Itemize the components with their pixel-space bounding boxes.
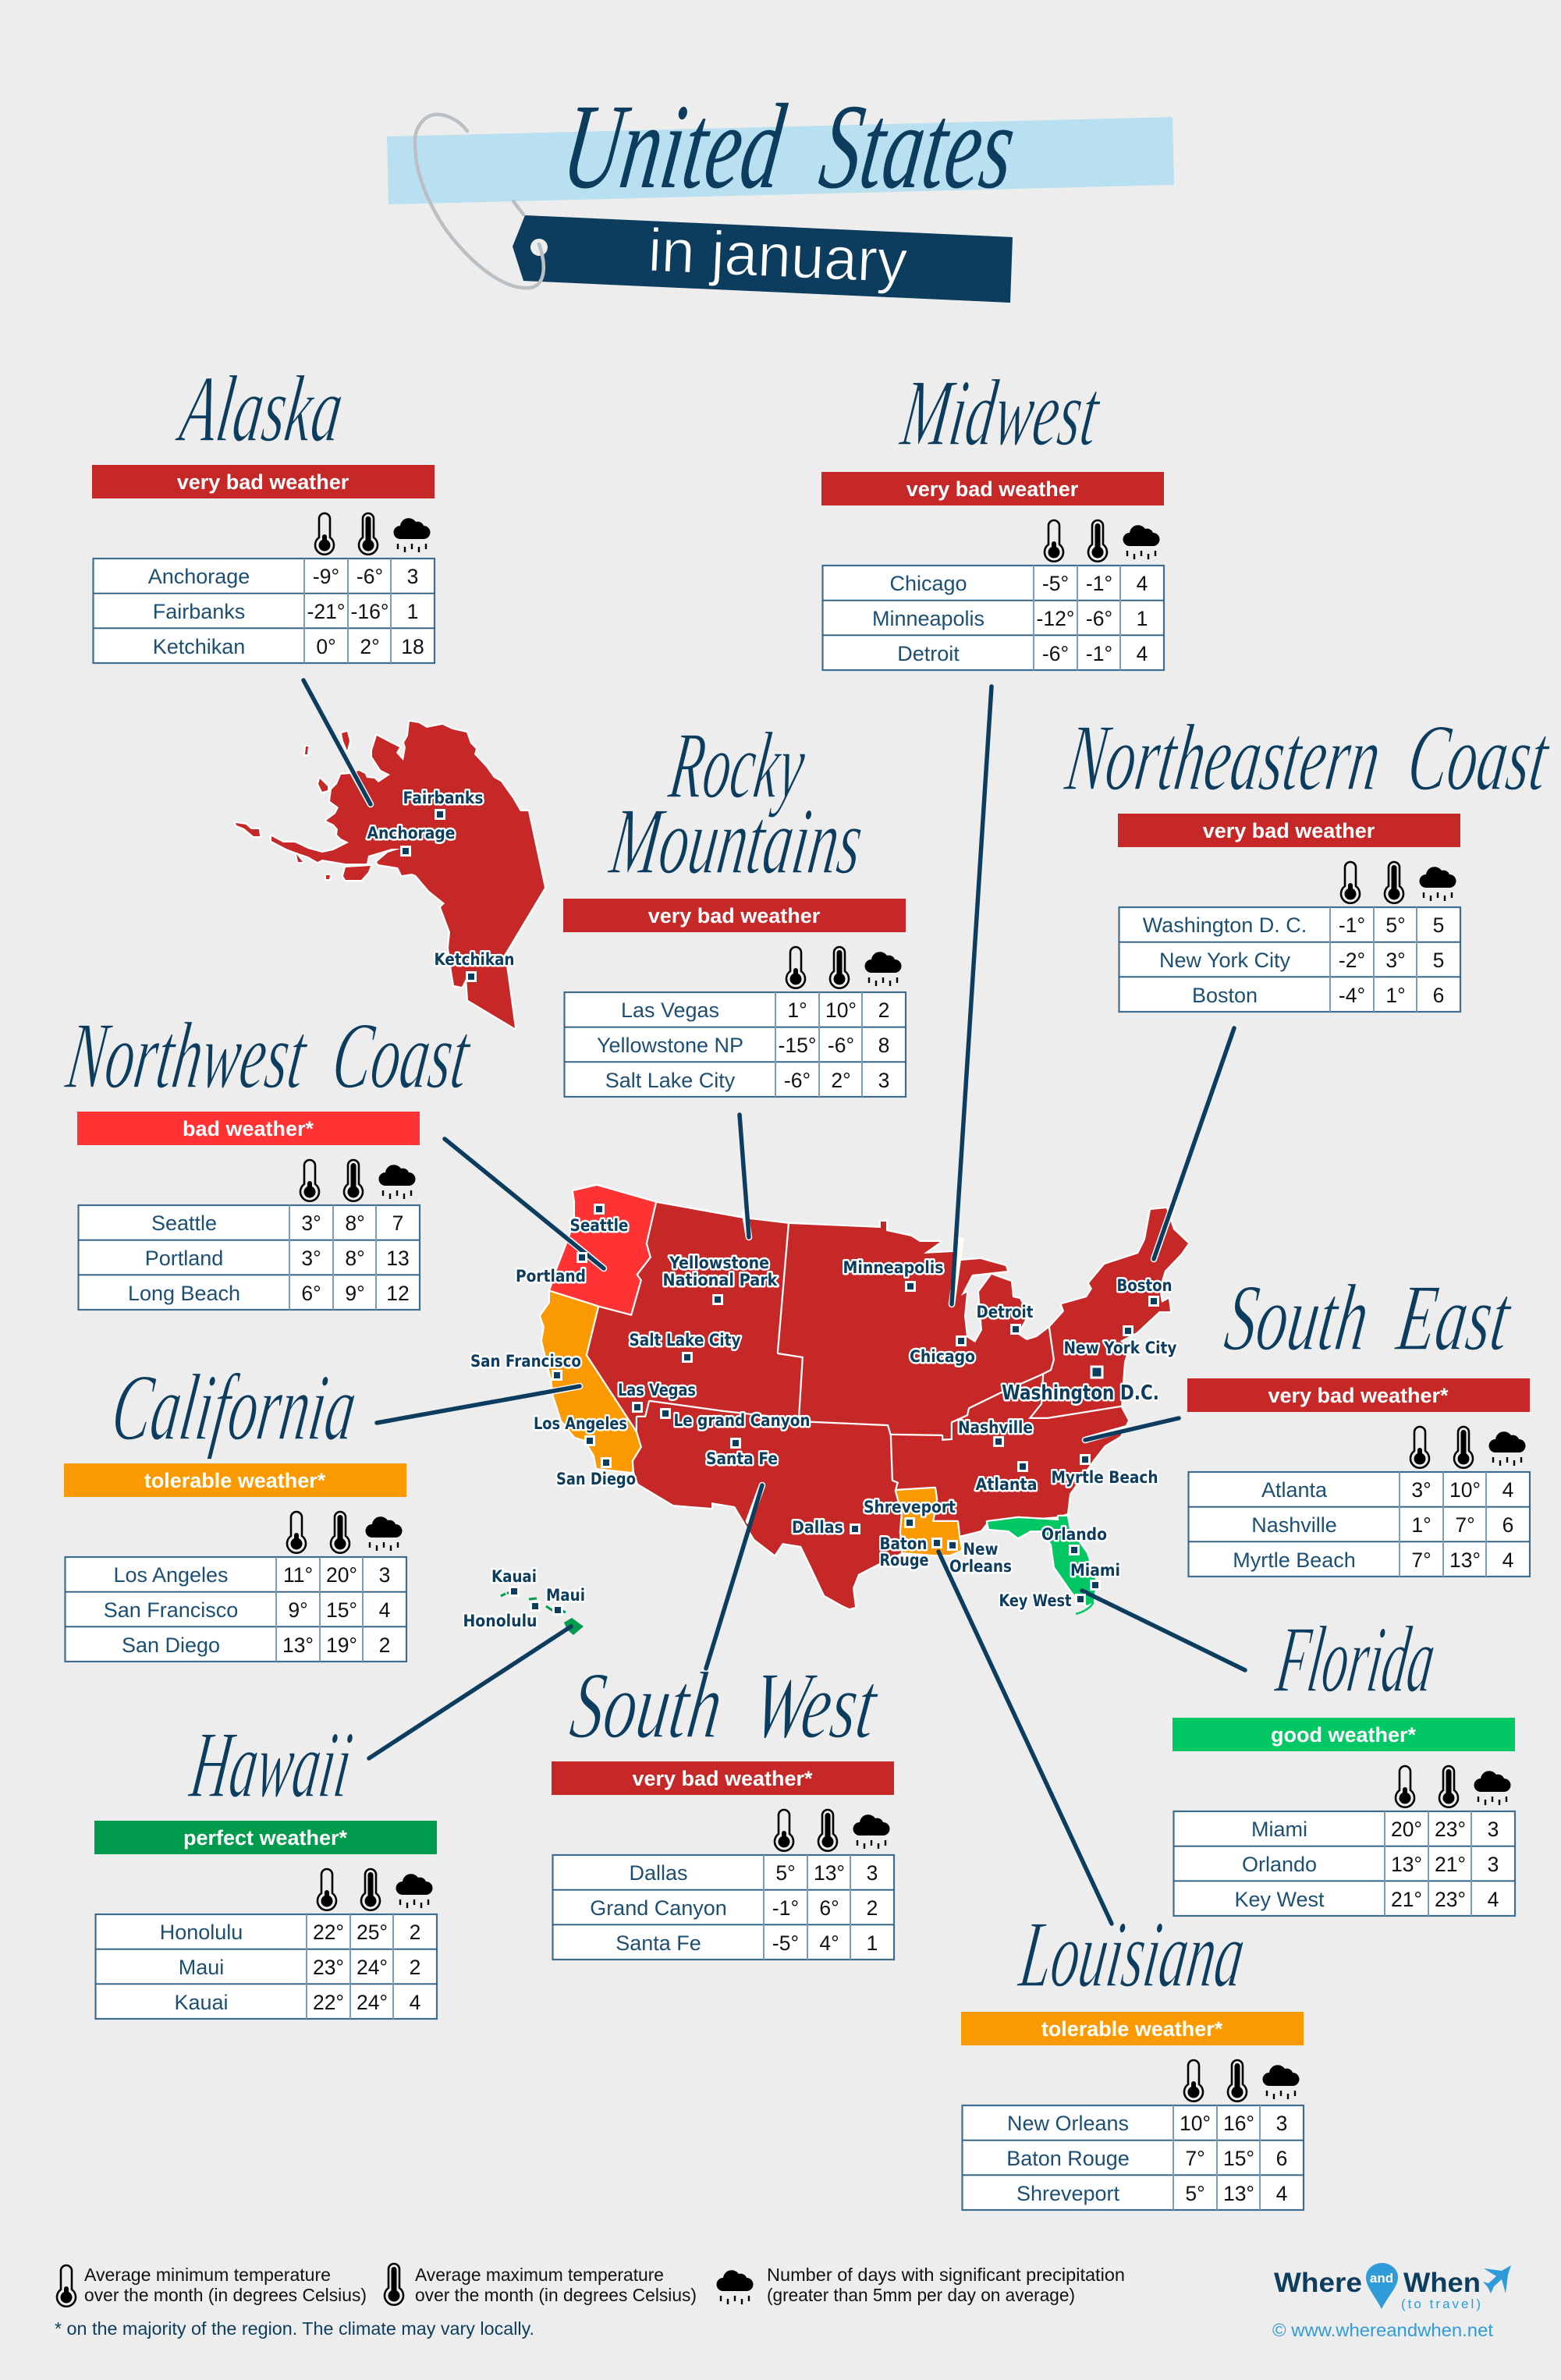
weather bar: [961, 2012, 1304, 2045]
city labels: San Diego: [556, 1470, 636, 1488]
card: Northwest Coast: 3°: [301, 1211, 321, 1235]
logo: Where and When: When: [1403, 2268, 1481, 2298]
region: South West: [633, 1402, 903, 1609]
panel: Louisiana: [961, 1902, 1304, 2210]
card: Hawaii: Maui: [179, 1956, 224, 1979]
footnote: * on the majority of the region. The climate may vary locally.: [55, 2318, 534, 2339]
panel: Northwest Coast: [60, 1003, 477, 1310]
icons: [775, 1810, 889, 1851]
card: Northeastern Coast: -2°: [1339, 949, 1365, 972]
leader line: Louisiana: [938, 1552, 1112, 1924]
card: Northwest Coast: 8°: [345, 1247, 365, 1270]
card: Louisiana: 6: [1276, 2147, 1287, 2170]
city labels: Atlanta: [975, 1475, 1038, 1494]
small islands: [501, 1592, 566, 1612]
card: Midwest: -1°: [1086, 572, 1112, 595]
card: Hawaii: 24°: [357, 1956, 388, 1979]
card: Northwest Coast: 6°: [301, 1282, 321, 1305]
card: Florida: Key West: [1234, 1888, 1325, 1911]
table: [565, 992, 906, 1097]
Alaska islands: [236, 732, 371, 880]
panel: Hawaii: [94, 1712, 437, 2019]
leader line: Midwest: [952, 686, 992, 1304]
card: Northeastern Coast: 5°: [1385, 913, 1406, 937]
card: Alaska: Ketchikan: [153, 635, 245, 658]
map: Hawaii islands: [501, 1592, 584, 1635]
card: Northwest Coast: 12: [386, 1282, 410, 1305]
icons: [1396, 1766, 1510, 1807]
heading: Midwest: Midwest: [895, 360, 1107, 466]
card: Louisiana: 10°: [1180, 2112, 1211, 2135]
card: Rocky Mountains: 1°: [787, 998, 807, 1022]
card: Midwest: [821, 472, 1164, 670]
icons: [786, 947, 902, 988]
city labels: New York City: [1064, 1339, 1177, 1357]
card: Alaska: 2°: [360, 635, 380, 658]
leader line: Hawaii: [369, 1626, 571, 1758]
card: Alaska: 18: [401, 635, 424, 658]
city labels: Shreveport: [864, 1498, 956, 1516]
tag string: [415, 115, 544, 288]
city labels: Le grand Canyon: [674, 1411, 810, 1430]
card: Florida: 20°: [1391, 1818, 1422, 1841]
region: Northwest Coast: [550, 1186, 657, 1316]
card: Rocky Mountains: 3: [878, 1069, 889, 1092]
card: Northeastern Coast: 5: [1433, 949, 1444, 972]
card: Louisiana: 7°: [1185, 2147, 1205, 2170]
card: Florida: good weather*: [1271, 1723, 1416, 1747]
card: Louisiana: 5°: [1185, 2182, 1205, 2205]
card: South West: -5°: [772, 1931, 799, 1955]
card: South East: 6: [1502, 1513, 1513, 1537]
map: contiguous United States: [541, 1186, 1188, 1614]
website: © www.whereandwhen.net: [1272, 2320, 1494, 2340]
card: California: 11°: [283, 1563, 313, 1587]
card: Midwest: very bad weather: [906, 477, 1079, 501]
card: Alaska: -6°: [357, 565, 383, 588]
card: Florida: 21°: [1435, 1853, 1466, 1876]
card: Midwest: 4: [1137, 572, 1148, 595]
card: South East: 7°: [1411, 1548, 1432, 1572]
card: Midwest: -6°: [1042, 642, 1069, 665]
card: California: 19°: [326, 1633, 357, 1657]
card: South West: Santa Fe: [616, 1931, 701, 1955]
Alaska mainland: [271, 722, 545, 1028]
card: California: Los Angeles: [113, 1563, 229, 1587]
card: Northwest Coast: Long Beach: [128, 1282, 240, 1305]
city labels: Anchorage: [367, 824, 456, 842]
city labels: New: [963, 1540, 999, 1559]
card: Hawaii: 25°: [357, 1921, 388, 1944]
tag hole: [530, 239, 548, 256]
city labels: Minneapolis: [843, 1258, 944, 1277]
leader line: California: [377, 1386, 580, 1423]
city labels: Washington D.C.: [1002, 1382, 1159, 1405]
card: California: 15°: [326, 1598, 357, 1622]
card: Florida: 13°: [1391, 1853, 1422, 1876]
card: Alaska: -21°: [307, 600, 345, 623]
heading: Rocky Mountains: Rocky: [663, 713, 811, 818]
icons: [1341, 862, 1456, 903]
city labels: Yellowstone: [669, 1254, 769, 1272]
card: Rocky Mountains: 2: [878, 998, 889, 1022]
city labels: Fairbanks: [403, 789, 484, 807]
card: Northeastern Coast: -1°: [1339, 913, 1365, 937]
card: Rocky Mountains: 2°: [831, 1069, 851, 1092]
card: Alaska: -16°: [351, 600, 388, 623]
card: Louisiana: Baton Rouge: [1006, 2147, 1130, 2170]
title block: [387, 79, 1174, 303]
card: Hawaii: Honolulu: [160, 1921, 243, 1944]
table: [66, 1557, 406, 1662]
card: Northwest Coast: 9°: [345, 1282, 365, 1305]
legend: precipitation: (greater than 5mm per day on average): [767, 2285, 1075, 2305]
card: California: 9°: [288, 1598, 308, 1622]
city labels: Dallas: [792, 1518, 843, 1537]
icons: [287, 1512, 403, 1553]
panel: Midwest: [821, 360, 1164, 670]
icons: [315, 513, 431, 555]
card: Rocky Mountains: 8: [878, 1034, 889, 1057]
card: Northeastern Coast: [1118, 814, 1460, 1012]
card: South West: -1°: [772, 1896, 799, 1920]
card: Florida: 23°: [1435, 1888, 1466, 1911]
subtitle tag: [513, 215, 1013, 303]
region: Florida: [988, 1516, 1096, 1605]
region: Louisiana: [896, 1488, 961, 1555]
card: Florida: Miami: [1251, 1818, 1307, 1841]
region: Midwest: [779, 1222, 1055, 1441]
card: South West: 4°: [819, 1931, 839, 1955]
city labels: National Park: [663, 1271, 778, 1289]
card: Northwest Coast: 8°: [345, 1211, 365, 1235]
card: Florida: 4: [1488, 1888, 1499, 1911]
Big Island: [564, 1618, 584, 1635]
card: Rocky Mountains: -15°: [779, 1034, 816, 1057]
table: [963, 2105, 1304, 2210]
legend: minimum temperature: [57, 2265, 367, 2307]
card: South West: very bad weather*: [632, 1767, 813, 1790]
card: Louisiana: 3: [1276, 2112, 1287, 2135]
heading: California: California: [106, 1355, 363, 1460]
legend: maximum temperature: over the month (in degrees Celsius): [415, 2285, 697, 2305]
heading: Rocky Mountains: [604, 713, 869, 894]
card: Hawaii: [94, 1821, 437, 2019]
weather bar: [92, 465, 435, 498]
weather bar: [563, 899, 906, 932]
card: South East: [1187, 1378, 1530, 1577]
heading: Hawaii: Hawaii: [184, 1712, 358, 1818]
card: South East: Myrtle Beach: [1233, 1548, 1356, 1572]
leader line: South West: [706, 1485, 762, 1669]
card: Hawaii: 22°: [313, 1991, 344, 2014]
card: Hawaii: 2: [410, 1956, 420, 1979]
card: Northeastern Coast: 6: [1433, 984, 1444, 1007]
map: Alaska: [236, 722, 545, 1028]
card: California: [64, 1463, 406, 1662]
card: Rocky Mountains: Salt Lake City: [605, 1069, 736, 1092]
leader line: Northwest Coast: [445, 1139, 604, 1268]
table: [78, 1205, 420, 1310]
card: California: 4: [379, 1598, 390, 1622]
icons: [318, 1869, 432, 1910]
legend: maximum temperature: [385, 2264, 697, 2305]
card: Alaska: Anchorage: [148, 565, 250, 588]
region: Northeastern Coast: [1028, 1208, 1188, 1419]
legend: maximum temperature: Average maximum temperature: [415, 2265, 664, 2285]
card: Hawaii: 24°: [357, 1991, 388, 2014]
card: Northeastern Coast: Washington D. C.: [1143, 913, 1307, 937]
heading: Rocky Mountains: Mountains: [604, 789, 869, 894]
card: Alaska: 1: [407, 600, 418, 623]
card: California: San Diego: [122, 1633, 220, 1657]
card: South West: 6°: [819, 1896, 839, 1920]
table: [1189, 1472, 1530, 1577]
card: Northwest Coast: Seattle: [151, 1211, 217, 1235]
city markers: [401, 810, 1158, 1615]
city labels: [367, 789, 1177, 1630]
heading: Northwest Coast: Northwest Coast: [60, 1003, 477, 1108]
legend: minimum temperature: over the month (in degrees Celsius): [84, 2285, 367, 2305]
card: Northeastern Coast: 3°: [1385, 949, 1406, 972]
card: Northwest Coast: bad weather*: [183, 1117, 314, 1140]
table: [822, 566, 1164, 670]
city labels: Kauai: [491, 1567, 537, 1586]
card: South West: 5°: [775, 1861, 796, 1885]
city labels: Detroit: [977, 1303, 1033, 1321]
card: Midwest: Minneapolis: [872, 607, 984, 630]
card: California: San Francisco: [104, 1598, 238, 1622]
card: South East: 1°: [1411, 1513, 1432, 1537]
panel: Alaska: [92, 356, 435, 663]
city labels: Rouge: [880, 1551, 928, 1570]
subtitle text: in january: [647, 215, 909, 296]
card: Louisiana: 16°: [1223, 2112, 1254, 2135]
card: Rocky Mountains: -6°: [828, 1034, 854, 1057]
card: Hawaii: 2: [410, 1921, 420, 1944]
title band: [387, 117, 1174, 204]
card: South East: Nashville: [1251, 1513, 1337, 1537]
card: Northeastern Coast: 1°: [1385, 984, 1406, 1007]
panel: Rocky Mountains: [563, 713, 906, 1097]
card: South West: [552, 1761, 894, 1960]
card: Midwest: -6°: [1086, 607, 1112, 630]
card: Hawaii: 22°: [313, 1921, 344, 1944]
card: Rocky Mountains: Yellowstone NP: [597, 1034, 743, 1057]
card: California: tolerable weather*: [144, 1469, 326, 1492]
leader line: Florida: [1082, 1591, 1245, 1670]
card: Louisiana: 13°: [1223, 2182, 1254, 2205]
weather bar: [77, 1112, 420, 1145]
table: [95, 1914, 437, 2019]
legend: precipitation: Number of days with significant precipitation: [767, 2265, 1125, 2285]
city labels: Miami: [1070, 1561, 1120, 1580]
Florida Keys: [1076, 1602, 1094, 1614]
card: South West: 2: [867, 1896, 878, 1920]
city labels: Orleans: [949, 1557, 1012, 1576]
city labels: Nashville: [958, 1418, 1033, 1437]
card: Northwest Coast: 3°: [301, 1247, 321, 1270]
card: South East: very bad weather*: [1268, 1384, 1449, 1407]
card: Northeastern Coast: -4°: [1339, 984, 1365, 1007]
panel: California: [64, 1355, 406, 1662]
legend: [55, 2264, 1125, 2339]
panel: South West: [552, 1653, 894, 1960]
icons: [1410, 1427, 1526, 1468]
card: South West: 3: [867, 1861, 878, 1885]
card: Midwest: -12°: [1037, 607, 1074, 630]
table: [1173, 1811, 1515, 1916]
card: Midwest: Chicago: [889, 572, 967, 595]
card: South East: 4: [1502, 1548, 1513, 1572]
region: South East: [892, 1375, 1128, 1536]
city labels: Las Vegas: [618, 1381, 696, 1399]
card: South West: 1: [867, 1931, 878, 1955]
city labels: Los Angeles: [534, 1414, 627, 1433]
card: Rocky Mountains: Las Vegas: [621, 998, 719, 1022]
card: Alaska: -9°: [313, 565, 339, 588]
icons: [300, 1160, 415, 1201]
card: Northwest Coast: 7: [392, 1211, 403, 1235]
card: Louisiana: tolerable weather*: [1041, 2017, 1223, 2041]
city labels: Seattle: [569, 1216, 629, 1235]
card: Louisiana: 15°: [1223, 2147, 1254, 2170]
card: Northwest Coast: [77, 1112, 420, 1310]
card: Florida: [1173, 1718, 1515, 1916]
city labels: Boston: [1117, 1276, 1172, 1295]
logo pin: [1366, 2263, 1398, 2309]
card: Midwest: Detroit: [897, 642, 960, 665]
card: Alaska: [92, 465, 435, 663]
card: Louisiana: Shreveport: [1016, 2182, 1120, 2205]
card: South East: 4: [1502, 1478, 1513, 1502]
weather bar: [821, 472, 1164, 505]
leader line: Northeastern Coast: [1154, 1028, 1234, 1259]
card: South West: Dallas: [629, 1861, 688, 1885]
card: Northeastern Coast: very bad weather: [1203, 819, 1375, 842]
heading: South West: South West: [565, 1653, 885, 1758]
card: Alaska: 3: [407, 565, 418, 588]
table: [94, 559, 435, 663]
weather bar: [552, 1761, 894, 1795]
logo plane: [1483, 2265, 1511, 2293]
card: Northeastern Coast: 5: [1433, 913, 1444, 937]
logo tagline: (to travel): [1401, 2297, 1481, 2311]
city labels: Chicago: [910, 1347, 975, 1366]
card: Hawaii: 23°: [313, 1956, 344, 1979]
heading: Alaska: Alaska: [172, 356, 349, 462]
leader line: South East: [1085, 1418, 1179, 1440]
city labels: Santa Fe: [706, 1449, 778, 1468]
city labels: Myrtle Beach: [1052, 1468, 1158, 1487]
card: Northwest Coast: Portland: [145, 1247, 223, 1270]
city labels: Salt Lake City: [629, 1331, 741, 1350]
card: South West: Grand Canyon: [590, 1896, 727, 1920]
panel: Florida: [1173, 1607, 1515, 1916]
card: Florida: 21°: [1391, 1888, 1422, 1911]
card: South East: 13°: [1449, 1548, 1481, 1572]
card: California: 3: [379, 1563, 390, 1587]
card: Alaska: 0°: [316, 635, 336, 658]
card: California: 2: [379, 1633, 390, 1657]
card: Alaska: Fairbanks: [153, 600, 245, 623]
card: Rocky Mountains: -6°: [784, 1069, 811, 1092]
card: South West: 13°: [814, 1861, 845, 1885]
card: Northeastern Coast: Boston: [1192, 984, 1258, 1007]
logo: Where and When: and: [1370, 2271, 1393, 2286]
card: California: 20°: [326, 1563, 357, 1587]
leader line: Alaska: [303, 680, 371, 804]
weather bar: [64, 1463, 406, 1497]
legend: precipitation: [716, 2265, 1125, 2305]
leader line: Rocky Mountains: [740, 1115, 749, 1237]
city labels: Orlando: [1041, 1525, 1107, 1544]
card: California: 13°: [282, 1633, 314, 1657]
card: Rocky Mountains: [563, 899, 906, 1097]
city labels: San Francisco: [470, 1352, 581, 1371]
panel: Northeastern Coast: [1059, 705, 1556, 1012]
card: Louisiana: [961, 2012, 1304, 2210]
card: Northeastern Coast: New York City: [1159, 949, 1291, 972]
card: Florida: 3: [1488, 1818, 1499, 1841]
card: South East: Atlanta: [1261, 1478, 1328, 1502]
icons: [1045, 520, 1159, 562]
city labels: Baton: [880, 1534, 927, 1553]
legend: minimum temperature: Average minimum temperature: [84, 2265, 331, 2285]
logo words: Where: [1274, 2268, 1362, 2298]
card: Hawaii: Kauai: [174, 1991, 229, 2014]
card: Alaska: very bad weather: [177, 470, 349, 494]
card: Rocky Mountains: 10°: [825, 998, 857, 1022]
icons: [1184, 2060, 1300, 2102]
card: Florida: 23°: [1435, 1818, 1466, 1841]
card: Rocky Mountains: very bad weather: [648, 904, 821, 928]
region: California: [541, 1292, 642, 1472]
card: South East: 3°: [1411, 1478, 1432, 1502]
weather bar: [1173, 1718, 1515, 1751]
panel: South East: [1187, 1265, 1530, 1577]
card: Midwest: 4: [1137, 642, 1148, 665]
card: Louisiana: 4: [1276, 2182, 1287, 2205]
card: Northwest Coast: 13: [386, 1247, 410, 1270]
card: Florida: Orlando: [1242, 1853, 1317, 1876]
weather bar: [94, 1821, 437, 1854]
logo: Where and When: [1272, 2263, 1511, 2340]
table: [552, 1855, 894, 1960]
weather bar: [1118, 814, 1460, 847]
region: Rocky Mountains: [587, 1203, 804, 1431]
weather bar: [1187, 1378, 1530, 1412]
card: Midwest: -5°: [1042, 572, 1069, 595]
card: Florida: 3: [1488, 1853, 1499, 1876]
card: South East: 10°: [1449, 1478, 1481, 1502]
city labels: Portland: [516, 1267, 586, 1286]
city labels: Key West: [999, 1591, 1072, 1610]
card: Hawaii: 4: [410, 1991, 420, 2014]
title text: United States: [555, 79, 1023, 214]
card: Midwest: -1°: [1086, 642, 1112, 665]
card: Louisiana: New Orleans: [1007, 2112, 1129, 2135]
heading: Louisiana: Louisiana: [1013, 1902, 1251, 2007]
card: Hawaii: perfect weather*: [183, 1826, 348, 1850]
city labels: Maui: [546, 1586, 585, 1605]
card: Midwest: 1: [1137, 607, 1148, 630]
city labels: Ketchikan: [434, 950, 515, 969]
city labels: Honolulu: [463, 1612, 537, 1630]
card: South East: 7°: [1455, 1513, 1475, 1537]
table: [1119, 907, 1460, 1012]
